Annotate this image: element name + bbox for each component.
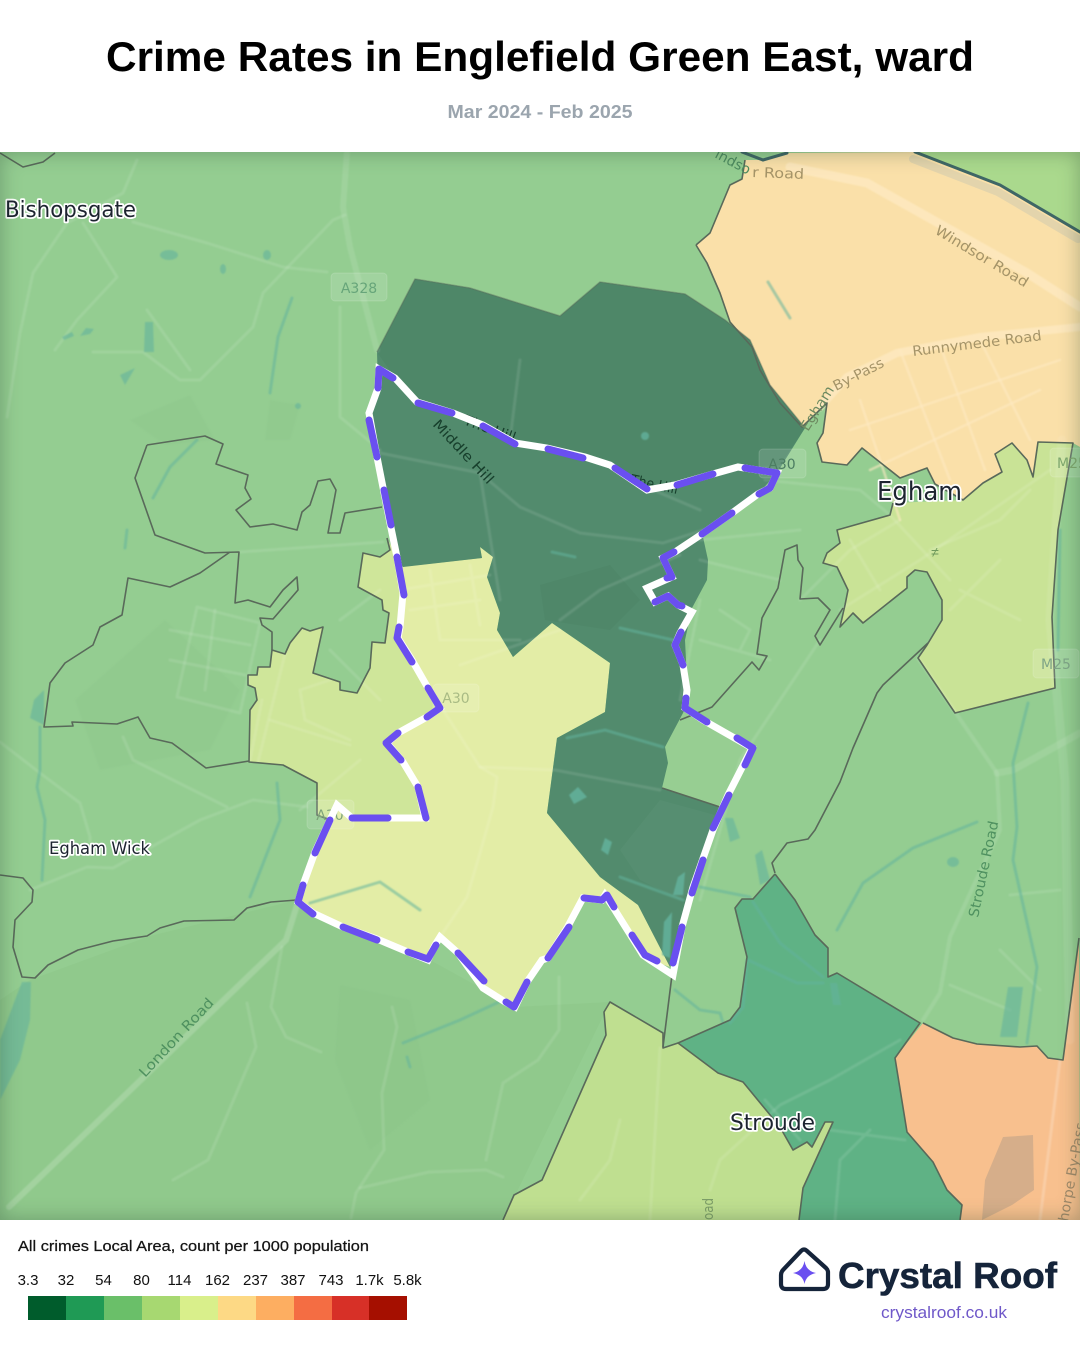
road label: Stroude Road: Stroude Road [966, 820, 1002, 919]
legend tick labels: 80 [133, 1272, 150, 1289]
ward and region boundary lines [0, 153, 1079, 1220]
region: ward right rectangle [662, 713, 752, 807]
legend tick labels: 32 [58, 1272, 74, 1289]
region: Egham beige [696, 152, 1080, 500]
road shield: A30 north: A30 [768, 457, 796, 473]
railway station symbol: ≠ [931, 544, 939, 560]
region: ward yellow [298, 547, 670, 1007]
road shield: A30 centre [433, 684, 479, 712]
place label: Egham: Egham [877, 477, 962, 507]
purple dashes [298, 369, 777, 1007]
road shield: A328 [331, 273, 387, 301]
legend title: All crimes Local Area, count per 1000 population [18, 1239, 369, 1255]
place label: Stroude: Stroude [730, 1111, 815, 1136]
road label: Middle Hill: Middle Hill [429, 417, 497, 488]
map panel [0, 146, 1080, 1223]
logo: Crystal Roof [781, 1250, 1058, 1322]
website link: crystalroof.co.uk [881, 1304, 1008, 1322]
region: west yellow green [248, 538, 440, 820]
place label: Bishopsgate: Bishopsgate [5, 198, 136, 223]
road label: The Hill east: The Hill [628, 472, 679, 498]
road shield: A328: A328 [341, 281, 377, 297]
water features [0, 250, 1060, 1100]
map edge vignette [0, 152, 1080, 1220]
road shield: M25 north [1050, 448, 1080, 477]
road label: By-Pass: By-Pass [831, 355, 887, 395]
region: Stroude darker green [678, 874, 962, 1220]
small square region [395, 735, 419, 760]
boundary river top [742, 152, 1080, 239]
legend tick labels: 743 [318, 1272, 344, 1289]
legend tick labels: 114 [168, 1272, 191, 1289]
legend tick labels: 3.3 [18, 1272, 38, 1289]
legend tick labels: 5.8k [393, 1272, 422, 1289]
dark patches north [377, 279, 804, 431]
region: top right corner [915, 152, 1080, 232]
road shield: A30 north [759, 449, 806, 478]
road shield: M25 south [1033, 649, 1079, 678]
road label: Windsor Road top start: indso [712, 146, 753, 178]
legend tick labels: 387 [280, 1272, 306, 1289]
place label: Egham Wick: Egham Wick [49, 839, 150, 859]
legend tick labels: 54 [95, 1272, 112, 1289]
road label: Egham By-Pass: Egham [798, 383, 838, 434]
legend tick labels: 1.7k [355, 1272, 384, 1289]
icon: house with star [781, 1250, 828, 1289]
title: Crime Rates in Englefield Green East, ward [106, 33, 974, 80]
region: south light green [503, 1002, 833, 1220]
region: southern darker farmland [0, 900, 610, 1220]
road label: Windsor Road: Windsor Road [932, 223, 1031, 291]
legend colour scale [28, 1296, 407, 1320]
subtitle: date range: Mar 2024 - Feb 2025 [448, 101, 632, 122]
legend tick labels [18, 1272, 422, 1289]
road shield: A30 west [307, 800, 354, 829]
legend [18, 1239, 422, 1320]
ward boundary outline [298, 369, 777, 1007]
road shield: A30 west: A30 [316, 808, 344, 824]
road label: Runnymede Road: Runnymede Road [912, 328, 1043, 360]
road label: south road fragment: oad [701, 1198, 717, 1220]
road network [0, 152, 1080, 1220]
wordmark: Crystal Roof [838, 1255, 1058, 1296]
legend tick labels: 162 [205, 1272, 230, 1289]
region: Egham south yellow green [823, 442, 1073, 713]
lighter land patches [75, 395, 430, 1150]
road label: London Road: London Road [136, 995, 217, 1081]
road label: Windsor Road top end: r Road [752, 165, 804, 183]
region: dark green low crime [369, 279, 805, 967]
road shield: M25 south: M25 [1041, 657, 1071, 673]
region: orange south east [895, 938, 1080, 1220]
road label: The Hill west: The Hill [461, 412, 518, 446]
legend tick labels: 237 [243, 1272, 268, 1289]
road shield: A30 centre: A30 [442, 691, 470, 707]
